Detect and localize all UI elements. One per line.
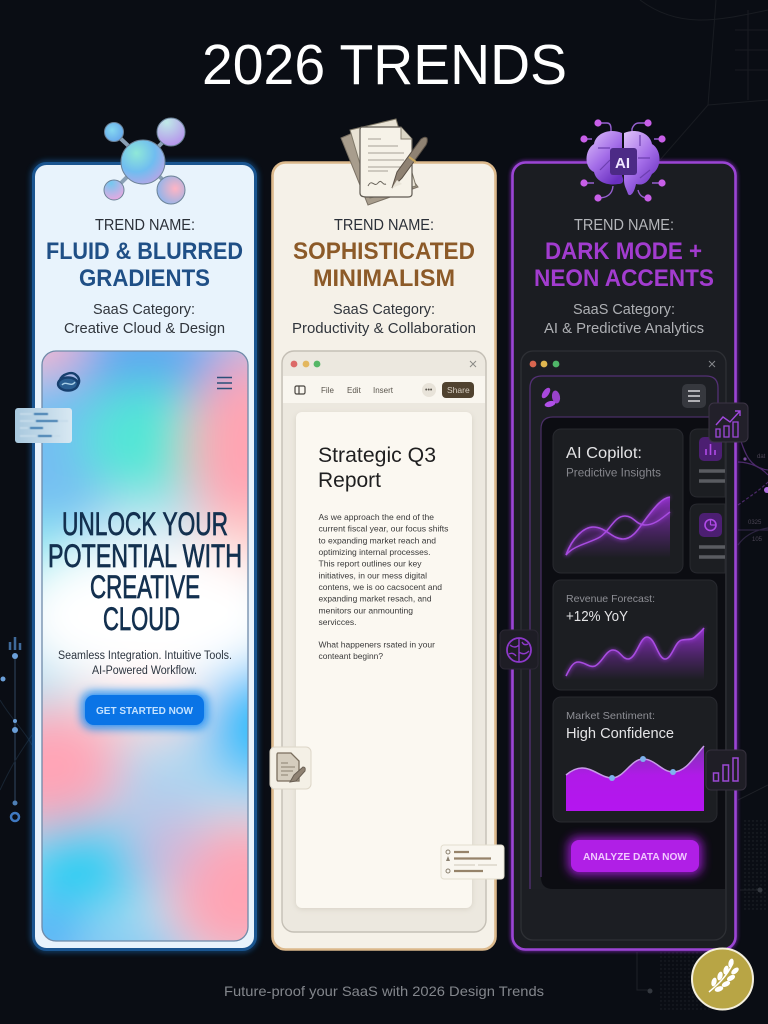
card: ai copilot: AI Copilot: <box>566 445 642 462</box>
card: revenue forecast: Revenue Forecast: <box>566 593 655 605</box>
document body text: to expanding market reach and <box>318 535 436 545</box>
heading: dark mode and neon accents: NEON ACCENTS <box>534 265 714 292</box>
mockup: document editor window <box>282 351 486 932</box>
icon: ai brain: AI <box>615 155 630 172</box>
text: tagline: Seamless Integration. Intuitive Tools. <box>58 650 232 662</box>
floating badge: rising chart <box>709 403 748 442</box>
headline: unlock your potential: CREATIVE <box>90 569 200 605</box>
title: 2026 TRENDS <box>202 33 567 97</box>
app logo <box>540 386 561 408</box>
chart: revenue forecast <box>566 628 704 680</box>
heading: sophisticated minimalism <box>293 238 475 292</box>
document body text: contens, we is oo cacsocent and <box>318 582 442 592</box>
app frame <box>530 376 725 889</box>
window controls <box>530 361 715 367</box>
heading: sophisticated minimalism: SOPHISTICATED <box>293 238 475 265</box>
floating widget: list <box>441 845 504 879</box>
label: trend name: TREND NAME: <box>95 217 195 234</box>
document body text: initiatives, in our mess digital <box>318 570 427 580</box>
card: small metric one <box>690 429 725 497</box>
heading: sophisticated minimalism: MINIMALISM <box>313 265 455 292</box>
document body text: current fiscal year, our focus shifts <box>318 524 449 534</box>
document body text: As we approach the end of the <box>318 512 434 522</box>
toolbar: ••• <box>425 387 433 394</box>
background decoration: right circuit <box>738 432 768 545</box>
document body text <box>318 512 449 661</box>
background decoration: right circuit: dat <box>757 454 766 460</box>
document body text: servicces. <box>318 617 356 627</box>
icon: molecule of gradient spheres <box>104 118 185 204</box>
document title <box>318 443 436 492</box>
card: ai copilot: Predictive Insights <box>566 466 661 480</box>
heading: fluid and blurred gradients: FLUID & BLURRED <box>46 238 243 265</box>
heading: fluid and blurred gradients <box>46 238 243 292</box>
window controls <box>291 361 476 367</box>
icon: ai brain <box>580 119 666 202</box>
document title: Strategic Q3 <box>318 443 436 467</box>
headline: unlock your potential <box>48 506 242 637</box>
floating badge: document with pen <box>270 747 311 789</box>
background circuit decoration: top right <box>640 0 768 160</box>
button: analyze data now <box>568 837 702 875</box>
card: revenue forecast <box>553 580 717 690</box>
headline: unlock your potential: POTENTIAL WITH <box>48 538 242 574</box>
footer tagline: Future-proof your SaaS with 2026 Design Trends <box>224 983 544 999</box>
heading: dark mode and neon accents: DARK MODE + <box>545 238 702 265</box>
toolbar: File <box>321 386 334 395</box>
document page <box>296 412 472 909</box>
panel: dark mode and neon accents <box>512 119 736 950</box>
background decoration: right circuit: 0325 <box>748 520 762 526</box>
text: saas category: SaaS Category: <box>93 301 195 318</box>
mockup: analytics window <box>521 351 726 940</box>
document body text: expanding market resach, and <box>318 594 432 604</box>
text: saas category <box>292 301 476 337</box>
button: analyze data now: ANALYZE DATA NOW <box>583 851 687 863</box>
label: trend name: TREND NAME: <box>574 217 674 234</box>
badge: gold wheat seal <box>692 948 753 1010</box>
menu button <box>682 384 706 408</box>
chart: predictive insights <box>566 497 670 558</box>
card: ai copilot <box>553 429 683 573</box>
document body text: What happeners rsated in your <box>318 640 435 650</box>
panel: sophisticated minimalism <box>272 119 496 950</box>
document body text: conteant beginn? <box>318 651 383 661</box>
text: saas category: AI & Predictive Analytics <box>544 320 704 337</box>
text: saas category: Productivity & Collaboration <box>292 320 476 337</box>
button: get started now: GET STARTED NOW <box>96 705 193 717</box>
background decoration: right circuit: 105 <box>752 537 763 543</box>
document body text: This report outlines our key <box>318 559 422 569</box>
panel: fluid and blurred gradients <box>27 118 262 956</box>
text: saas category: Creative Cloud & Design <box>64 320 225 337</box>
button: get started now <box>82 692 207 728</box>
headline: unlock your potential: UNLOCK YOUR <box>62 506 228 542</box>
heading: fluid and blurred gradients: GRADIENTS <box>79 265 210 292</box>
document title: Report <box>318 468 381 492</box>
card: small metric two <box>690 504 725 573</box>
toolbar <box>295 382 474 398</box>
text: saas category: SaaS Category: <box>333 301 435 318</box>
icon: hamburger menu <box>217 378 232 388</box>
card: market sentiment: Market Sentiment: <box>566 710 655 722</box>
text: saas category <box>64 301 225 337</box>
toolbar: Insert <box>373 386 394 395</box>
background decoration: lower right dots and lines <box>637 785 768 1010</box>
label: trend name: TREND NAME: <box>334 217 434 234</box>
icon: papers and pen <box>341 119 427 205</box>
card: market sentiment: High Confidence <box>566 725 674 742</box>
floating widget: blurred text lines <box>15 408 72 443</box>
background decoration: left circuit <box>0 637 32 821</box>
mockup: gradient landing page <box>41 350 249 942</box>
headline: unlock your potential: CLOUD <box>103 601 180 637</box>
icon: creative cloud logo <box>58 373 79 390</box>
toolbar: Edit <box>347 386 362 395</box>
card: revenue forecast: +12% YoY <box>566 608 628 625</box>
document body text: menitors our anmounting <box>318 605 413 615</box>
card: market sentiment <box>553 697 717 822</box>
text: saas category: SaaS Category: <box>573 301 675 318</box>
text: tagline <box>58 650 232 677</box>
chart: market sentiment <box>566 746 704 811</box>
text: tagline: AI-Powered Workflow. <box>92 665 197 677</box>
toolbar: Share <box>447 385 470 395</box>
heading: dark mode and neon accents <box>534 238 714 292</box>
floating badge: bar chart <box>706 750 746 790</box>
document body text: optimizing internal processes. <box>318 547 430 557</box>
dashboard area <box>541 417 725 889</box>
floating badge: brain <box>500 630 538 669</box>
text: saas category <box>544 301 704 337</box>
